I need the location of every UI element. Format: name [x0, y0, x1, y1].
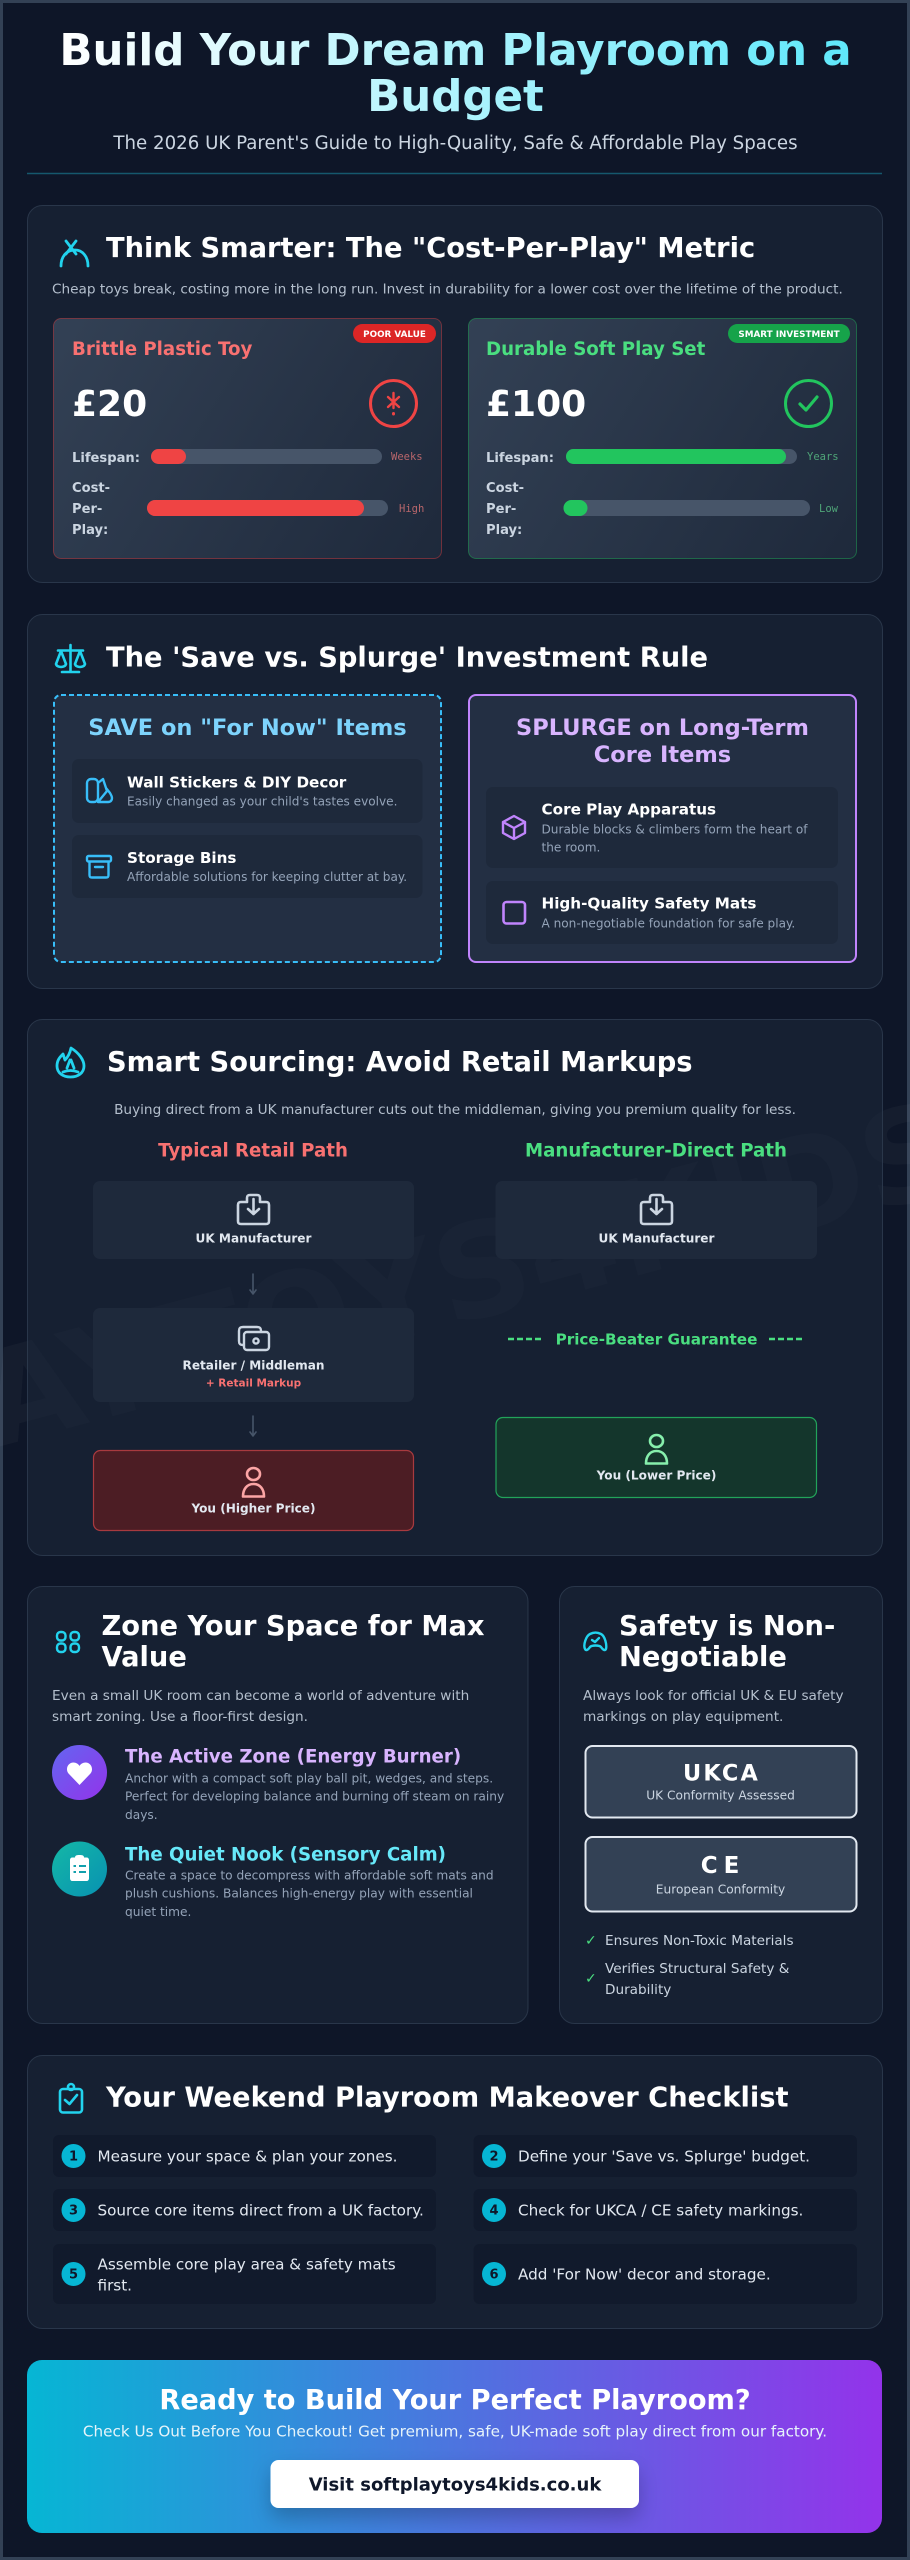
checklist: safety benefits: ✓ [585, 1971, 597, 1987]
card: brittle plastic toy [54, 318, 442, 558]
icon: heart [52, 1745, 107, 1800]
panel: safety [560, 1586, 882, 2024]
icon: storage box [87, 856, 111, 878]
badge: UKCA [586, 1746, 856, 1818]
lifespan bar [486, 449, 839, 466]
zone description: plush cushions. Balances high-energy play with essential [125, 1886, 473, 1900]
zone description: quiet time. [125, 1905, 191, 1919]
lifespan bar: Weeks [391, 451, 423, 463]
CTA heading: Ready to Build Your Perfect Playroom? [159, 2385, 751, 2416]
save title: SAVE on "For Now" Items [88, 715, 407, 741]
heading: zones: Zone Your Space for Max [102, 1611, 485, 1642]
step label: You (Lower Price) [596, 1468, 716, 1482]
cost-per-play bar: High [399, 503, 424, 515]
step: you lower price [496, 1418, 816, 1498]
cost-per-play bar [72, 481, 424, 538]
badge: poor value [353, 324, 436, 343]
icon: swatch [87, 779, 112, 802]
intro text: Cheap toys break, costing more in the long run. Invest in durability for a lower cost over the lifetime of the product. [52, 282, 843, 298]
column title: Manufacturer-Direct Path [525, 1140, 787, 1162]
button: Visit softplaytoys4kids.co.uk [309, 2474, 602, 2496]
zone title: The Active Zone (Energy Burner) [125, 1746, 461, 1768]
icon: broken toy [61, 241, 88, 266]
icon: broken circle [370, 380, 416, 426]
intro text: Buying direct from a UK manufacturer cuts out the middleman, giving you premium quality for less. [114, 1102, 796, 1118]
badge: smart investment [728, 324, 850, 343]
step: retailer [93, 1308, 414, 1402]
step 4: 4 [489, 2204, 499, 2218]
checklist: safety benefits: Ensures Non-Toxic Materials [605, 1933, 794, 1949]
zone: quiet [52, 1842, 494, 1919]
icon: cube [503, 816, 525, 839]
splurge title: Core Items [594, 742, 731, 768]
step 5: first. [98, 2276, 132, 2294]
step 5: Assemble core play area & safety mats [98, 2256, 396, 2274]
panel: zones [28, 1586, 528, 2024]
step 2: 2 [489, 2150, 499, 2164]
step: UK manufacturer [496, 1181, 817, 1259]
icon: retailer [239, 1327, 269, 1350]
lifespan bar [72, 449, 423, 466]
subtitle: The 2026 UK Parent's Guide to High-Quality, Safe & Affordable Play Spaces [112, 133, 798, 154]
panel: smart sourcing [28, 1020, 882, 1556]
zone description: Perfect for developing balance and burning off steam on rainy [125, 1790, 504, 1804]
badge: CE: European Conformity [656, 1882, 785, 1896]
cost-per-play bar: Per- [486, 502, 516, 517]
zone description: Create a space to decompress with affordable soft mats and [125, 1868, 494, 1882]
title: Build Your Dream Playroom on a [59, 26, 852, 76]
cost-per-play bar: Low [819, 503, 839, 515]
title: Budget [367, 72, 544, 122]
lifespan bar: Lifespan: [72, 451, 140, 466]
intro text: markings on play equipment. [583, 1709, 783, 1725]
step 2: Define your 'Save vs. Splurge' budget. [518, 2148, 810, 2166]
step: you higher price [94, 1450, 414, 1530]
CTA text: Check Us Out Before You Checkout! Get premium, safe, UK-made soft play direct from our factory. [83, 2422, 827, 2440]
cost-per-play bar: Cost- [486, 481, 524, 496]
step 6: Add 'For Now' decor and storage. [518, 2266, 771, 2284]
heading: cost-per-play: Think Smarter: The "Cost-Per-Play" Metric [106, 233, 755, 264]
card title: Durable Soft Play Set [486, 339, 706, 360]
step 3: Source core items direct from a UK factory. [98, 2202, 424, 2220]
column: manufacturer direct path [496, 1140, 817, 1498]
step: UK manufacturer [93, 1181, 414, 1259]
zone description: days. [125, 1808, 158, 1822]
icon: clipboard [52, 1842, 107, 1896]
badge: poor value: POOR VALUE [363, 330, 426, 340]
item title: Core Play Apparatus [542, 800, 716, 818]
item: core play apparatus [486, 787, 838, 868]
panel: save vs splurge [28, 614, 882, 988]
cost-per-play bar: Cost- [72, 481, 110, 496]
icon: zones grid [57, 1632, 79, 1652]
intro text: Even a small UK room can become a world of adventure with [52, 1688, 469, 1704]
step 3 [53, 2189, 436, 2231]
badge: smart investment: SMART INVESTMENT [738, 330, 840, 340]
icon: gamepad [584, 1632, 606, 1650]
icon: factory download [641, 1195, 672, 1224]
step 6 [474, 2244, 857, 2304]
item description: Easily changed as your child's tastes evolve. [127, 794, 397, 808]
step 5 [53, 2244, 436, 2304]
item description: Affordable solutions for keeping clutter at bay. [127, 870, 407, 884]
cost-per-play bar [486, 481, 839, 538]
item title: Wall Stickers & DIY Decor [127, 774, 347, 792]
icon: factory download [238, 1195, 269, 1224]
step 3: 3 [69, 2204, 78, 2218]
lifespan bar: Years [807, 451, 839, 463]
heading: zones: Value [102, 1642, 187, 1673]
price: £20 [72, 384, 147, 425]
item: storage bins [72, 835, 422, 898]
heading: safety: Negotiable [619, 1642, 787, 1673]
card: durable soft play set [468, 318, 856, 558]
column title: Typical Retail Path [158, 1140, 348, 1162]
step 1: 1 [69, 2150, 78, 2164]
checklist: safety benefits: Verifies Structural Safety & [605, 1961, 790, 1977]
header [27, 26, 882, 174]
item title: High-Quality Safety Mats [542, 894, 756, 912]
panel: call to action [27, 2360, 882, 2533]
step label: Retailer / Middleman [183, 1358, 324, 1372]
step label: You (Higher Price) [190, 1502, 316, 1516]
splurge title: SPLURGE on Long-Term [516, 715, 809, 741]
markup label: + Retail Markup [206, 1378, 302, 1390]
button [270, 2460, 639, 2508]
badge: CE [586, 1837, 856, 1912]
icon: scale [56, 645, 85, 672]
checklist: safety benefits [585, 1933, 794, 1998]
icon: person [646, 1435, 667, 1464]
item title: Storage Bins [127, 849, 236, 867]
step 1 [53, 2135, 436, 2177]
checklist: safety benefits: Durability [605, 1982, 671, 1998]
heading: safety: Safety is Non- [619, 1611, 835, 1642]
price: £100 [486, 384, 586, 425]
guarantee label: Price-Beater Guarantee [556, 1330, 757, 1348]
checklist: safety benefits: ✓ [585, 1933, 597, 1949]
badge: UKCA: UK Conformity Assessed [646, 1788, 795, 1802]
icon: clipboard check [60, 2084, 82, 2112]
heading: checklist: Your Weekend Playroom Makeover Checklist [105, 2082, 789, 2114]
step 6: 6 [489, 2268, 499, 2282]
card title: Brittle Plastic Toy [72, 339, 253, 360]
box: save [54, 695, 441, 962]
zone: active [52, 1745, 504, 1822]
cost-per-play bar: Per- [72, 502, 102, 517]
badge: UKCA: UKCA [683, 1760, 760, 1786]
item description: A non-negotiable foundation for safe play. [542, 916, 795, 930]
item description: the room. [542, 840, 600, 854]
step 4: Check for UKCA / CE safety markings. [518, 2202, 803, 2220]
step label: UK Manufacturer [599, 1232, 714, 1246]
panel: weekend checklist [28, 2056, 882, 2328]
cost-per-play bar: Play: [486, 523, 522, 538]
badge: CE: CE [701, 1853, 745, 1879]
panel: cost-per-play metric [28, 206, 882, 582]
step 2 [474, 2135, 857, 2177]
item: safety mats [486, 881, 838, 944]
step 4 [474, 2189, 857, 2231]
heading: save vs splurge: The 'Save vs. Splurge' Investment Rule [106, 642, 708, 674]
intro text: Always look for official UK & EU safety [583, 1688, 844, 1704]
arrow [250, 1274, 256, 1294]
cost-per-play bar: Play: [72, 523, 108, 538]
intro text: smart zoning. Use a floor-first design. [52, 1709, 308, 1725]
item description: Durable blocks & climbers form the heart of [542, 822, 808, 836]
heading: smart sourcing: Smart Sourcing: Avoid Retail Markups [107, 1047, 693, 1078]
icon: mat [504, 902, 525, 924]
step 5: 5 [69, 2268, 78, 2282]
icon: flame [57, 1048, 84, 1077]
icon: person [243, 1468, 264, 1496]
icon: check circle [786, 380, 832, 426]
item: wall stickers [72, 759, 422, 823]
zone description: Anchor with a compact soft play ball pit, wedges, and steps. [125, 1772, 493, 1786]
column: typical retail path [93, 1140, 414, 1530]
step label: UK Manufacturer [196, 1232, 311, 1246]
step 1: Measure your space & plan your zones. [98, 2148, 397, 2166]
arrow [250, 1416, 256, 1436]
box: splurge [469, 695, 856, 962]
lifespan bar: Lifespan: [486, 451, 554, 466]
zone title: The Quiet Nook (Sensory Calm) [125, 1844, 446, 1866]
